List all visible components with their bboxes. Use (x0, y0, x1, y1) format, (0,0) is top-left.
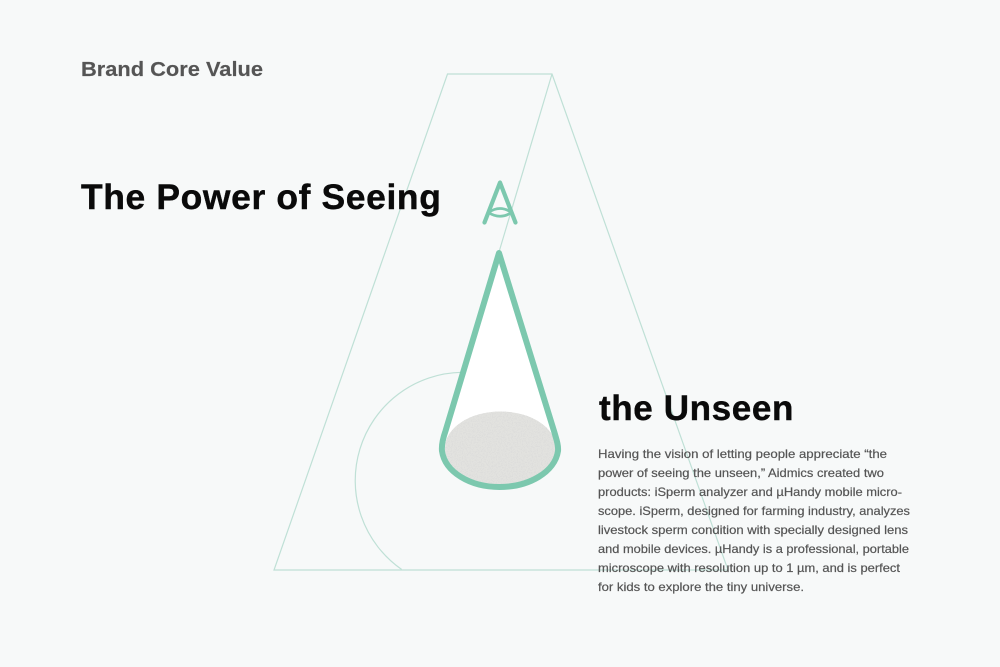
large letter A outline (274, 74, 728, 570)
subtitle: the unseen: the Unseen (599, 389, 794, 428)
body paragraph: scope. iSperm, designed for farming industry, analyzes (598, 504, 910, 518)
cone outline (442, 253, 558, 487)
icon: small letter A with eye (484, 182, 516, 222)
title: the power of seeing: The Power of Seeing (81, 178, 442, 217)
brand core value heading: Brand Core Value (81, 58, 263, 81)
body paragraph: for kids to explore the tiny universe. (598, 580, 804, 594)
body paragraph: power of seeing the unseen,” Aidmics created two (598, 466, 884, 480)
body paragraph: products: iSperm analyzer and µHandy mobile micro- (598, 485, 902, 499)
body paragraph: livestock sperm condition with specially designed lens (598, 523, 908, 537)
cone: beam of light with lens (442, 253, 558, 487)
body paragraph (598, 447, 910, 594)
sample disc (445, 412, 556, 484)
cone body (442, 253, 558, 487)
body paragraph: and mobile devices. µHandy is a professional, portable (598, 542, 909, 556)
body paragraph: Having the vision of letting people appreciate “the (598, 447, 887, 461)
body paragraph: microscope with resolution up to 1 µm, and is perfect (598, 561, 901, 575)
